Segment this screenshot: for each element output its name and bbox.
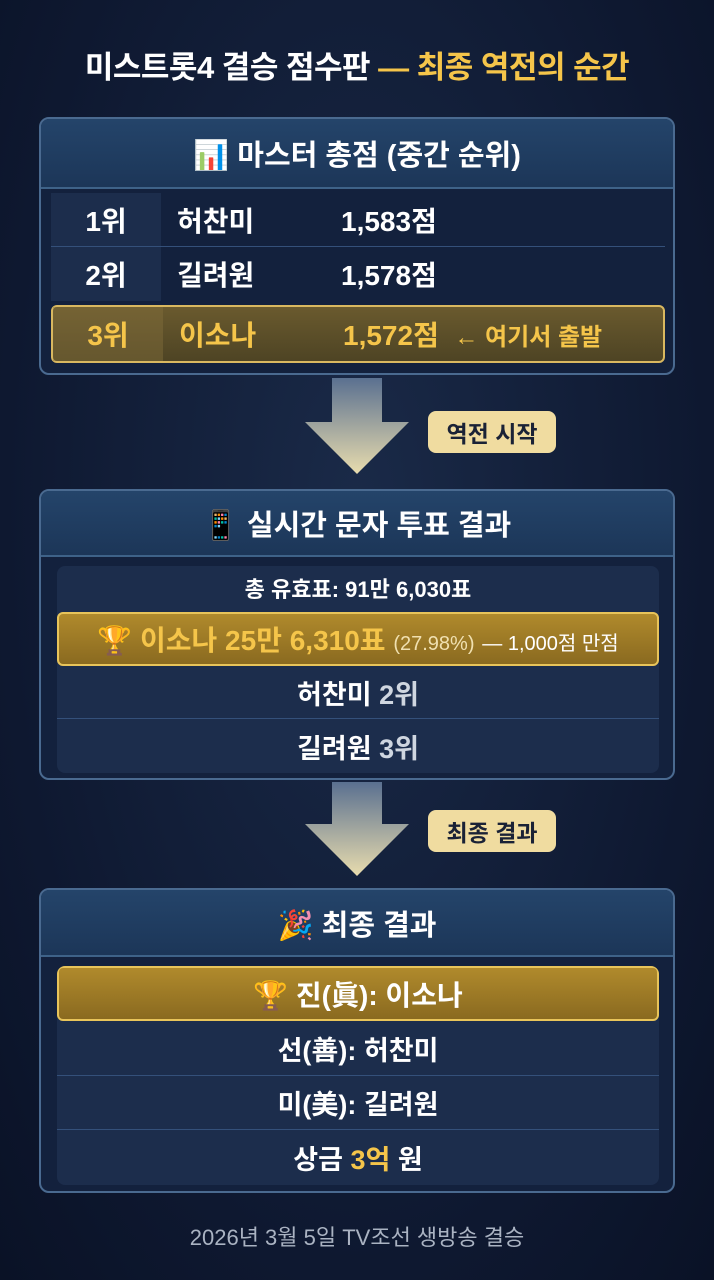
2nd — [57, 666, 659, 719]
inner results — [57, 566, 659, 773]
2nd: 허찬미 — [297, 680, 372, 710]
label: reversal start — [428, 411, 556, 453]
3rd: 길려원 — [297, 734, 372, 764]
jin: 🏆 진(眞): 이소나 — [253, 980, 463, 1010]
row 1: 허찬미 — [177, 206, 254, 236]
heading: 📱 실시간 문자 투표 결과 — [203, 510, 511, 542]
heading — [41, 890, 673, 957]
winner votes — [57, 612, 659, 666]
row 3 highlighted: 이소나 — [179, 320, 256, 351]
title: 미스트롯4 결승 점수판 — 최종 역전의 순간 — [85, 50, 629, 85]
row 1 — [51, 193, 665, 247]
panel: master scores — [39, 117, 675, 375]
row 3 highlighted: 1,572점 ← 여기서 출발 — [343, 320, 602, 351]
heading — [41, 491, 673, 557]
prize: 상금 원 — [293, 1145, 423, 1175]
seon — [57, 1021, 659, 1076]
inner final list — [57, 966, 659, 1185]
panel: final — [39, 888, 675, 1193]
3rd: 3위 — [379, 734, 419, 764]
label: reversal start: 역전 시작 — [446, 421, 538, 447]
winner votes: 🏆 이소나 25만 6,310표 (27.98%) — 1,000점 만점 — [97, 625, 619, 656]
row 1: 1,583점 — [341, 206, 437, 236]
row 1: 1위 — [85, 206, 127, 236]
row 3 highlighted: 3위 — [87, 320, 129, 351]
label: final result — [428, 810, 556, 852]
row 2: 2위 — [85, 260, 127, 291]
mi — [57, 1076, 659, 1130]
panel: live votes — [39, 489, 675, 780]
row 2 — [51, 247, 437, 301]
prize: 3억 — [350, 1145, 390, 1175]
row 2: 길려원 — [177, 260, 254, 291]
heading — [41, 119, 673, 189]
footer: 2026년 3월 5일 TV조선 생방송 결승 — [190, 1225, 524, 1250]
mi: 미(美): 길려원 — [278, 1090, 438, 1120]
jin — [57, 966, 659, 1021]
label: final result: 최종 결과 — [446, 820, 538, 846]
arrow 2 — [305, 782, 409, 876]
heading: 🎉 최종 결과 — [278, 910, 436, 942]
row 2: 1,578점 — [341, 260, 437, 291]
2nd: 2위 — [379, 680, 419, 710]
heading: 📊 마스터 총점 (중간 순위) — [193, 140, 521, 172]
arrow 1 — [305, 378, 409, 474]
seon: 선(善): 허찬미 — [278, 1036, 438, 1066]
3rd — [297, 734, 419, 764]
total votes: 총 유효표: 91만 6,030표 — [245, 577, 471, 602]
row 3 highlighted — [51, 305, 665, 363]
